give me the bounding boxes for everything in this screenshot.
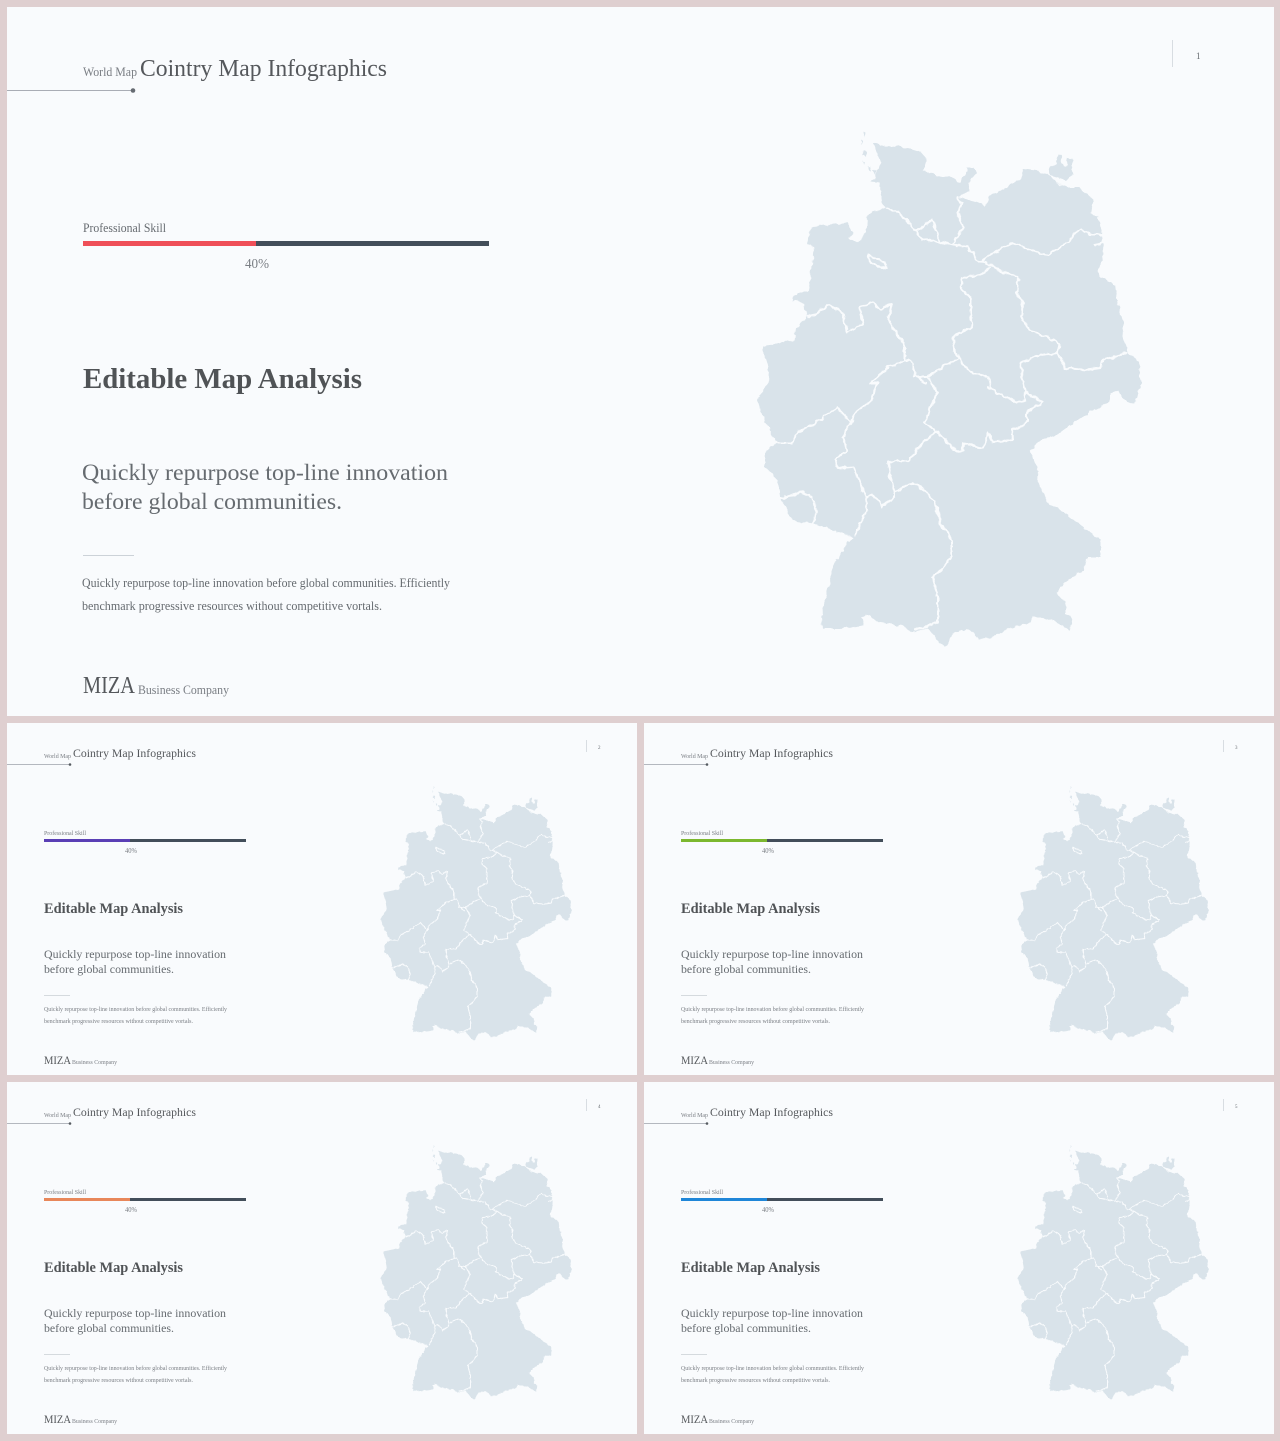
body text: benchmark progressive resources without competitive vortals. [82,599,382,613]
heading: Editable Map Analysis [44,1260,183,1276]
page number [586,740,601,752]
header line with dot [7,88,135,93]
progress value: 40% [125,1206,137,1214]
body text [44,1006,227,1025]
subheading: Quickly repurpose top-line innovation [44,1308,226,1320]
brand: MIZA [681,1053,708,1067]
page number [1172,40,1200,67]
brand [44,1412,117,1426]
header: world map label: World Map [44,753,71,760]
page number [586,1099,601,1111]
title: Cointry Map Infographics [73,746,196,760]
brand: MIZA [44,1053,71,1067]
skill label: Professional Skill [44,830,86,837]
title: Cointry Map Infographics [140,56,387,82]
header line with dot [644,763,708,766]
progress bar [681,839,883,842]
page number: 1 [1196,51,1200,61]
brand: Business Company [709,1060,754,1066]
subheading: before global communities. [44,1323,174,1335]
panel: slide 5 blue [644,1082,1274,1434]
brand: Business Company [138,683,230,697]
subheading: before global communities. [681,1323,811,1335]
body text: Quickly repurpose top-line innovation before global communities. Efficiently [44,1006,227,1013]
subheading [44,949,226,976]
brand: Business Company [72,1419,117,1425]
header line with dot [7,1122,71,1125]
page number: 2 [598,746,601,751]
progress bar [44,839,246,842]
brand: MIZA [681,1412,708,1426]
brand: MIZA [44,1412,71,1426]
progress value: 40% [245,257,269,272]
subheading: before global communities. [681,964,811,976]
panel: main slide 1 [7,7,1274,716]
title: Cointry Map Infographics [73,1105,196,1119]
progress bar [83,241,489,246]
skill label: Professional Skill [83,221,166,235]
panel: slide 4 orange [7,1082,637,1434]
brand: Business Company [72,1060,117,1066]
map of Germany [1018,1146,1208,1400]
body text: benchmark progressive resources without competitive vortals. [681,1019,830,1025]
body text: Quickly repurpose top-line innovation before global communities. Efficiently [44,1365,227,1372]
page number [1223,1099,1238,1111]
header line with dot [644,1122,708,1125]
title: Cointry Map Infographics [710,1105,833,1119]
brand [681,1412,754,1426]
header: world map label: World Map [681,1112,708,1119]
progress value: 40% [762,1206,774,1214]
subheading [681,949,863,976]
body text: benchmark progressive resources without competitive vortals. [44,1378,193,1384]
page number: 4 [598,1105,601,1110]
skill label: Professional Skill [681,1189,723,1196]
body text: Quickly repurpose top-line innovation before global communities. Efficiently [681,1006,864,1013]
body text: Quickly repurpose top-line innovation before global communities. Efficiently [82,576,451,590]
page number: 3 [1235,746,1238,751]
skill label: Professional Skill [681,830,723,837]
panel: slide 3 green [644,723,1274,1075]
heading: Editable Map Analysis [44,901,183,917]
body text: benchmark progressive resources without competitive vortals. [44,1019,193,1025]
progress bar [44,1198,246,1201]
header: world map label: World Map [681,753,708,760]
body text [44,1365,227,1384]
heading: Editable Map Analysis [681,1260,820,1276]
subheading: before global communities. [82,489,342,514]
header line with dot [7,763,71,766]
brand [44,1053,117,1067]
subheading: Quickly repurpose top-line innovation [44,949,226,961]
body text [681,1365,864,1384]
progress value: 40% [125,847,137,855]
body text: Quickly repurpose top-line innovation before global communities. Efficiently [681,1365,864,1372]
page number [1223,740,1238,752]
map of Germany [381,787,571,1041]
subheading [44,1308,226,1335]
subheading [681,1308,863,1335]
heading: Editable Map Analysis [83,363,362,395]
heading: Editable Map Analysis [681,901,820,917]
title: Cointry Map Infographics [710,746,833,760]
subheading: before global communities. [44,964,174,976]
body text [82,576,451,613]
brand [681,1053,754,1067]
map of Germany [758,133,1140,647]
subheading [82,460,449,514]
subheading: Quickly repurpose top-line innovation [681,1308,863,1320]
subheading: Quickly repurpose top-line innovation [82,460,449,485]
header: world map label: World Map [83,65,137,79]
body text: benchmark progressive resources without competitive vortals. [681,1378,830,1384]
body text [681,1006,864,1025]
map of Germany [381,1146,571,1400]
header: world map label: World Map [44,1112,71,1119]
progress bar [681,1198,883,1201]
brand: MIZA [83,673,136,699]
map of Germany [1018,787,1208,1041]
progress value: 40% [762,847,774,855]
page number: 5 [1235,1105,1238,1110]
brand [83,673,230,699]
panel: slide 2 purple [7,723,637,1075]
skill label: Professional Skill [44,1189,86,1196]
subheading: Quickly repurpose top-line innovation [681,949,863,961]
brand: Business Company [709,1419,754,1425]
